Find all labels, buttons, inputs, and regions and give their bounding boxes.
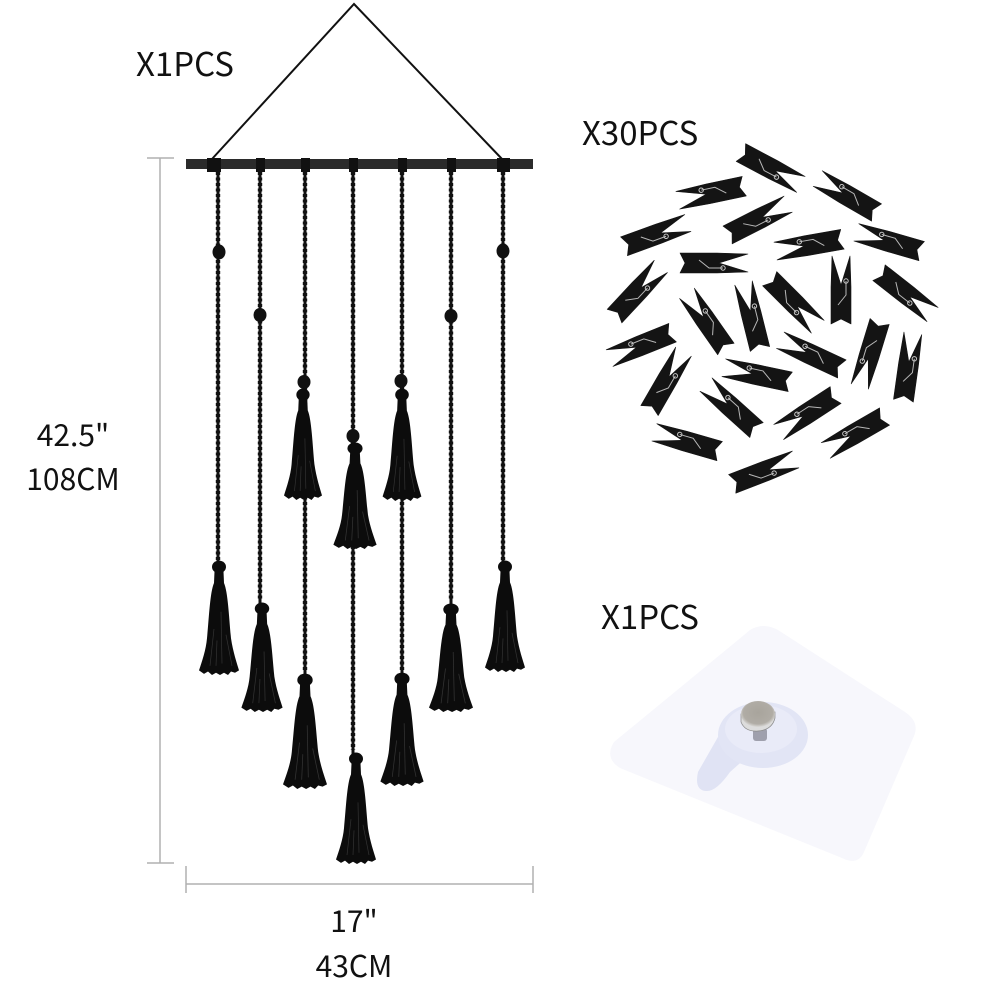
screw stem bbox=[753, 728, 767, 741]
adhesive pad bbox=[610, 626, 916, 861]
wall hanging with tassels bbox=[186, 4, 533, 864]
suction cup tab bbox=[697, 716, 748, 791]
wooden rod bbox=[186, 159, 533, 169]
dimension: height label bbox=[26, 411, 120, 499]
hanging string bbox=[212, 4, 502, 159]
tassels bbox=[199, 389, 525, 864]
suction cup bbox=[718, 702, 808, 768]
cup inner ring bbox=[725, 705, 797, 753]
heading: clips quantity: X30PCS bbox=[582, 107, 698, 155]
dimension: width line bbox=[186, 866, 533, 893]
rod knots bbox=[207, 158, 510, 172]
dimension: height label: 108CM bbox=[26, 455, 120, 499]
mini clips group bbox=[606, 144, 939, 493]
adhesive hook bbox=[610, 626, 916, 861]
dimension: width label: 17" bbox=[330, 897, 378, 941]
dimension: height line bbox=[147, 158, 174, 863]
heading: hanger quantity: X1PCS bbox=[136, 38, 234, 86]
dimension: height label: 42.5" bbox=[37, 411, 109, 455]
heading: hook quantity: X1PCS bbox=[601, 591, 699, 639]
beaded cords bbox=[218, 168, 503, 754]
dimension: width label bbox=[316, 897, 392, 986]
metal knob rim bbox=[741, 712, 775, 731]
metal knob bbox=[741, 701, 775, 727]
cord beading texture bbox=[218, 172, 503, 750]
dimension: width label: 43CM bbox=[316, 942, 392, 986]
wooden beads bbox=[212, 244, 510, 443]
